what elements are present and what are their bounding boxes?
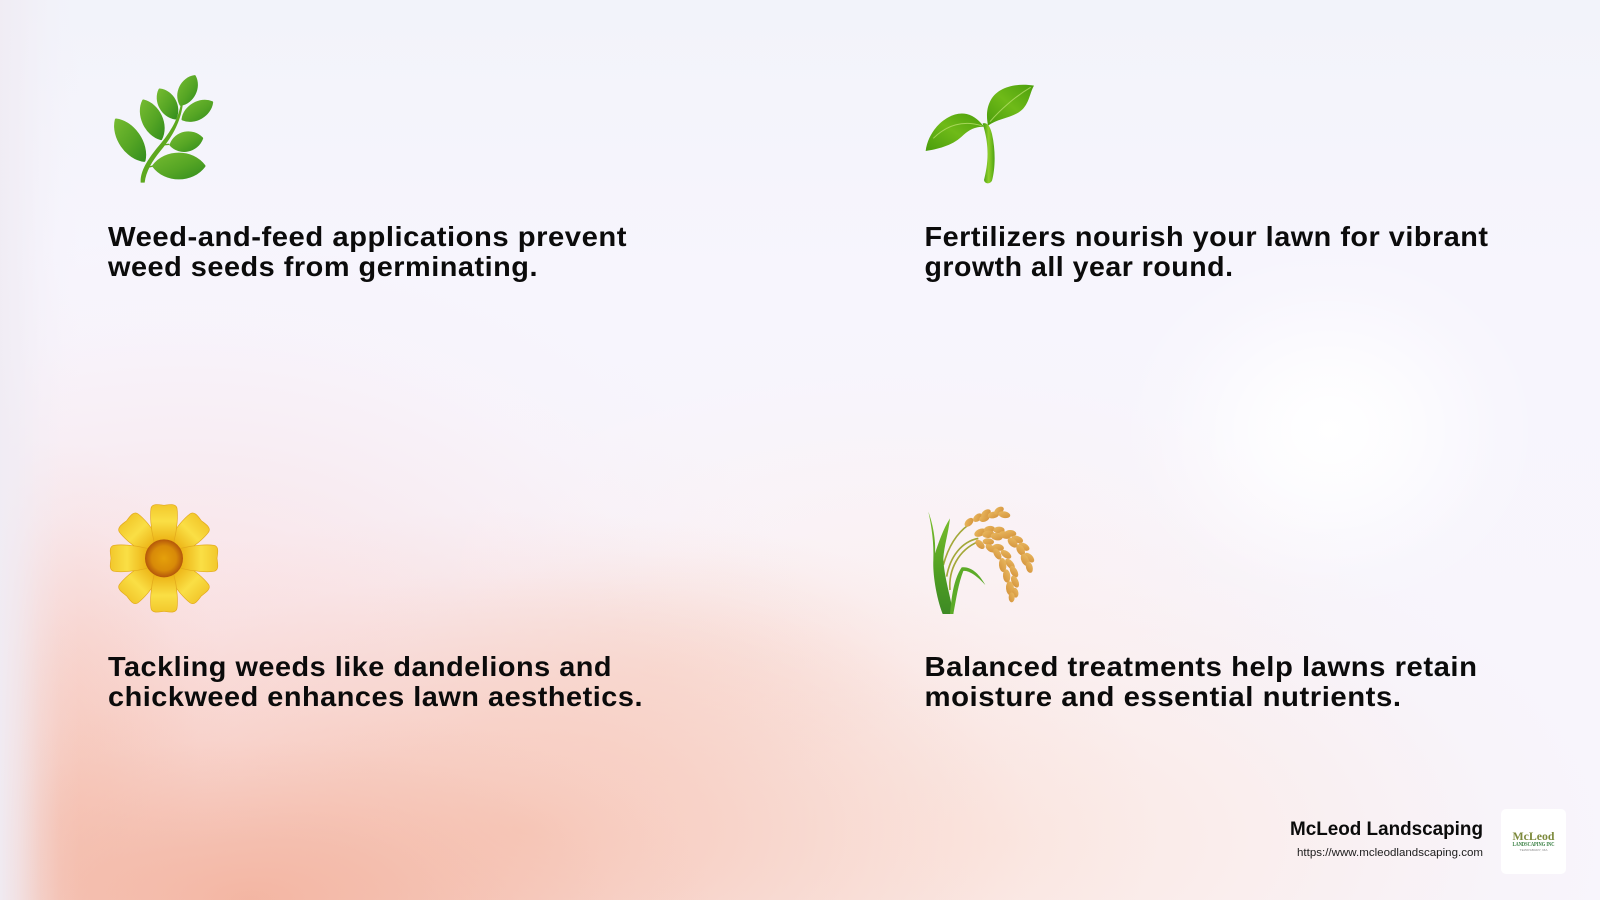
- text: tackling weeds: chickweed enhances lawn aesthetics.: [108, 681, 643, 712]
- text: tackling weeds: Tackling weeds like dandelions and: [108, 651, 612, 682]
- brand url: https://www.mcleodlandscaping.com: [1297, 847, 1483, 859]
- logo card: TEWKSBURY, MA: [1520, 848, 1548, 852]
- text: balanced treatments: moisture and essential nutrients.: [924, 681, 1402, 712]
- logo card: [1501, 809, 1566, 874]
- icon: herb: [115, 76, 212, 183]
- brand name: McLeod Landscaping: [1290, 819, 1483, 840]
- icon: seedling: [926, 85, 1034, 183]
- text: weed-and-feed: weed seeds from germinating.: [107, 251, 538, 282]
- text: balanced treatments: Balanced treatments help lawns retain: [924, 651, 1478, 682]
- text: fertilizers: Fertilizers nourish your lawn for vibrant: [924, 221, 1488, 252]
- text: fertilizers: growth all year round.: [924, 251, 1234, 282]
- logo card: LANDSCAPING INC: [1512, 842, 1554, 848]
- icon: rice: [928, 505, 1036, 614]
- text: weed-and-feed: Weed-and-feed applications prevent: [108, 221, 627, 252]
- icon: flower: [110, 505, 218, 612]
- logo card: McLeod: [1512, 829, 1555, 843]
